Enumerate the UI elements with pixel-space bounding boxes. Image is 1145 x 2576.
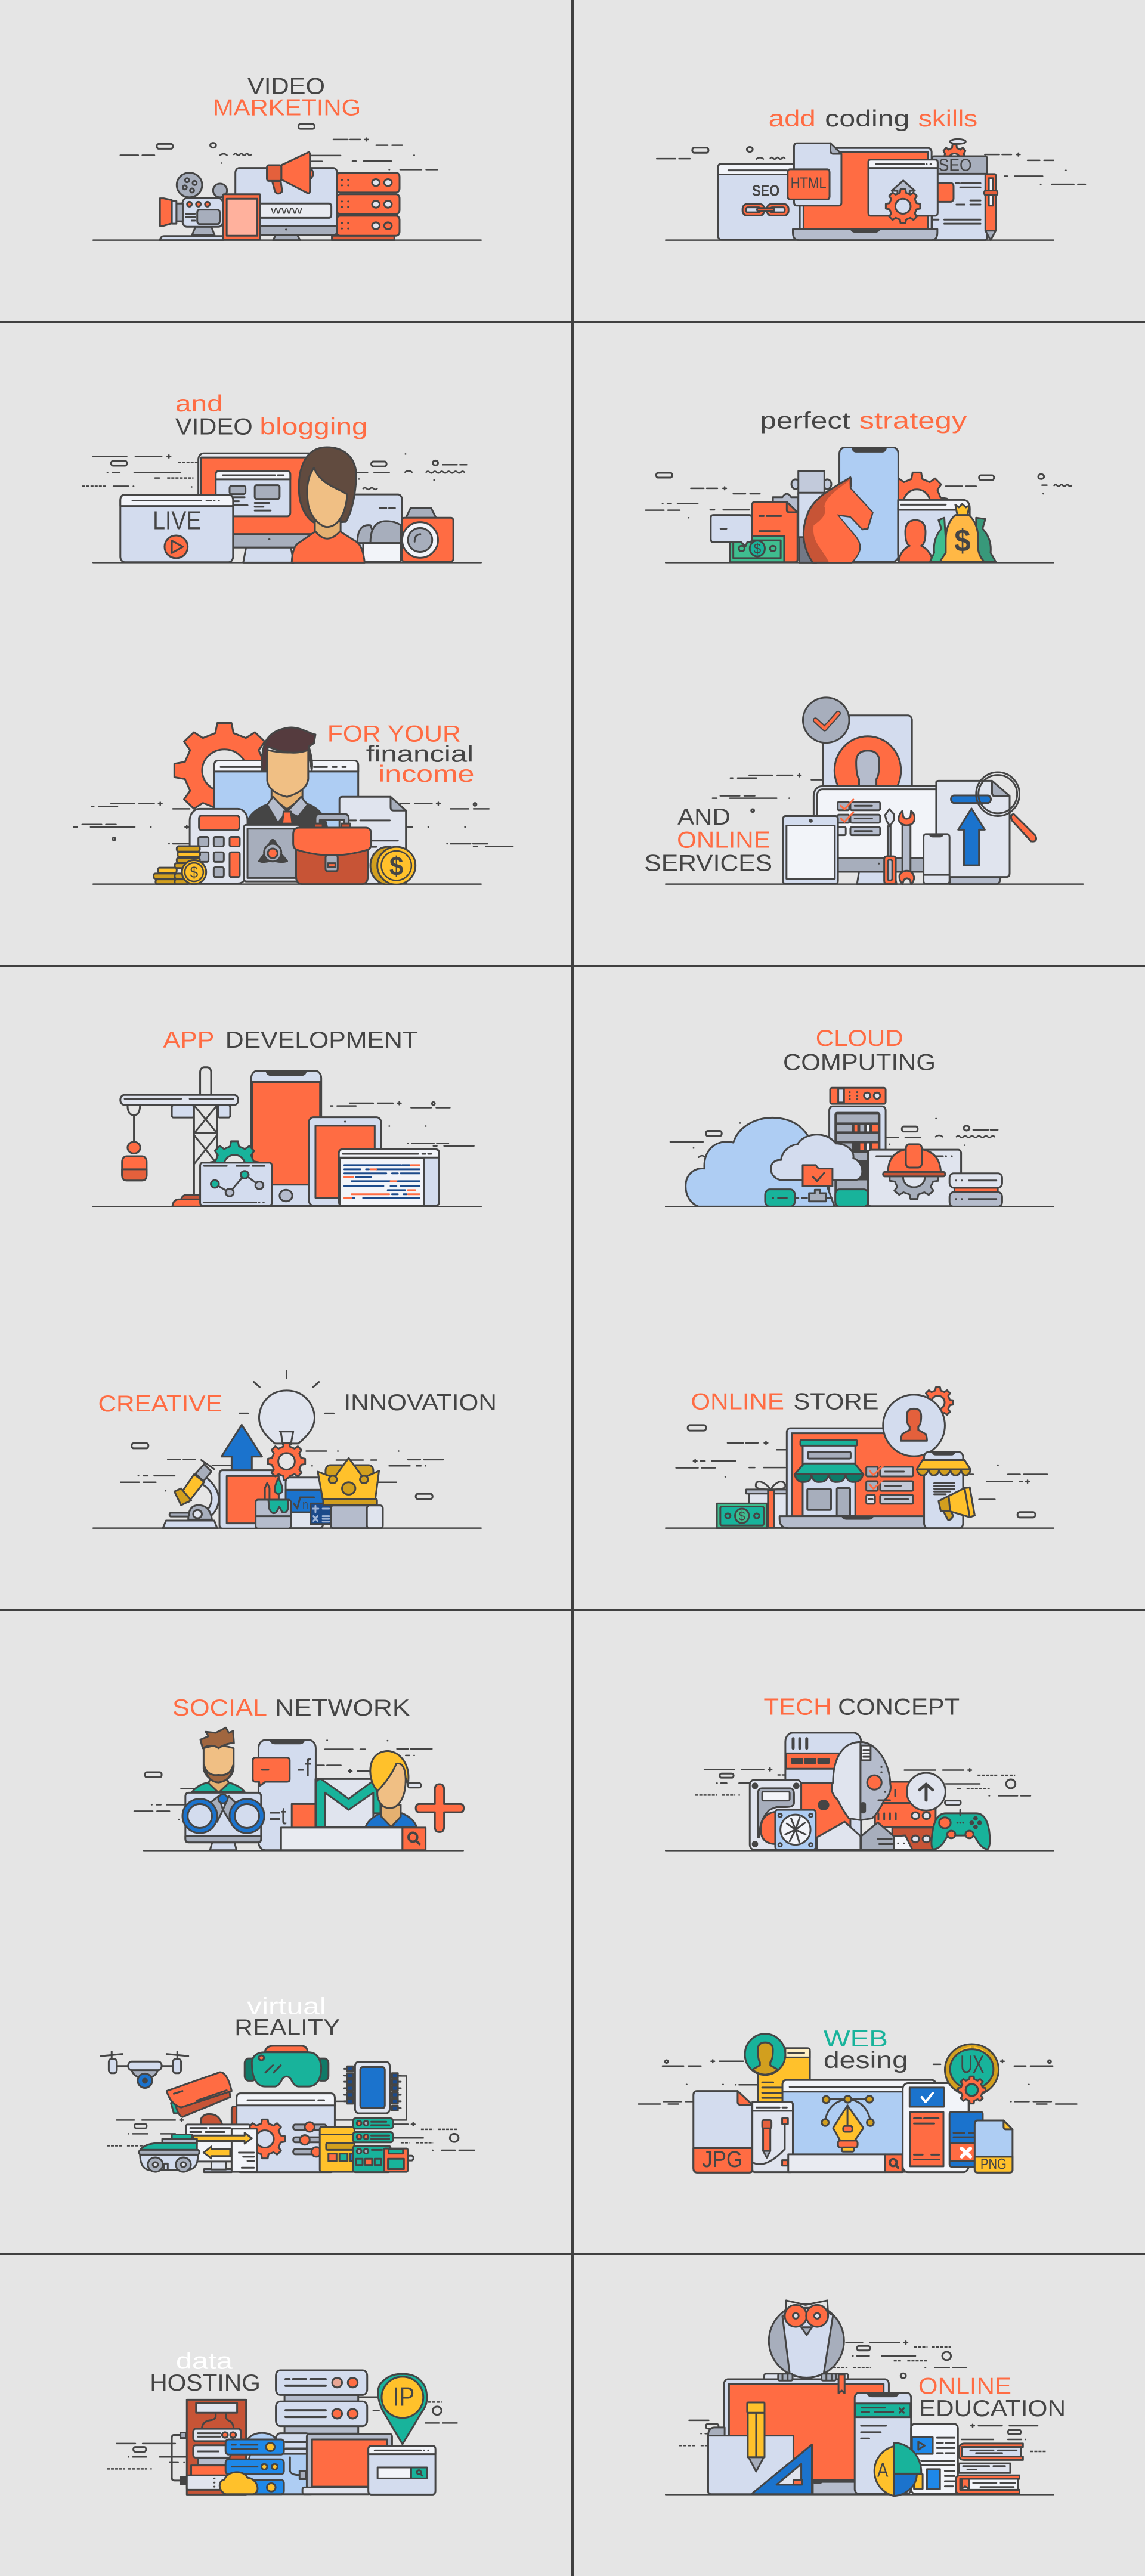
heading: data hosting: data xyxy=(176,2348,233,2374)
panel: perfect strategy xyxy=(646,408,1072,562)
block: right column rows 7 and 8 xyxy=(639,2026,1076,2496)
icon: pie chart xyxy=(874,2443,921,2496)
heading: add coding skills: skills xyxy=(918,106,977,132)
icon: game controller xyxy=(932,1810,990,1849)
heading: virtual reality xyxy=(234,1993,340,2041)
heading: video marketing: MARKETING xyxy=(213,95,361,120)
heading: online store: STORE xyxy=(793,1389,878,1414)
figure: man with beard xyxy=(192,1727,245,1792)
panel: creative innovation xyxy=(93,1371,497,1528)
icon: money bags xyxy=(930,504,996,562)
icon: banknote xyxy=(730,536,784,562)
block: right column rows 5 and 6 xyxy=(666,1387,1054,1850)
icon: tablet xyxy=(223,194,260,240)
icon: seo document: SEO xyxy=(939,156,972,175)
icon: search window xyxy=(369,2446,435,2494)
panel: online education xyxy=(666,2301,1066,2496)
panel: large server stack xyxy=(276,2370,367,2457)
heading: web desing: WEB xyxy=(824,2026,888,2052)
icon: blue servers xyxy=(225,2439,284,2494)
heading: and online services: AND xyxy=(677,804,731,829)
heading: and video blogging: blogging xyxy=(259,414,368,439)
panel: data hosting xyxy=(107,2348,457,2494)
heading: perfect strategy: perfect xyxy=(760,408,850,434)
icon: calculator xyxy=(190,809,247,884)
icon: browser window xyxy=(216,471,290,516)
panel: social network xyxy=(134,1695,464,1850)
icon: owl xyxy=(769,2301,844,2380)
heading: creative innovation: CREATIVE xyxy=(98,1391,222,1417)
icon: jpg file xyxy=(694,2091,753,2172)
icon: large cloud xyxy=(686,1117,834,1206)
icon: location pin ip: IP xyxy=(393,2382,414,2411)
icon: html file xyxy=(788,143,841,206)
heading: video marketing xyxy=(213,73,361,120)
icon: profile window xyxy=(898,500,970,562)
figure: woman xyxy=(292,447,364,562)
heading: creative innovation xyxy=(98,1390,497,1417)
icon: magnifying glass xyxy=(976,772,1036,841)
block: left column rows 1 and 2 xyxy=(82,73,481,562)
icon: briefcase xyxy=(293,814,372,884)
icon: safe xyxy=(244,825,301,881)
heading: app development xyxy=(163,1027,418,1053)
icon: png file: PNG xyxy=(980,2156,1007,2172)
heading: add coding skills: coding xyxy=(825,106,909,132)
icon: mobile shop xyxy=(917,1452,970,1528)
heading: add coding skills: add xyxy=(769,106,816,132)
icon: server tower xyxy=(830,1106,886,1206)
heading: app development: APP xyxy=(163,1027,214,1053)
icon: tablet xyxy=(309,1117,381,1206)
heading: data hosting: HOSTING xyxy=(150,2370,261,2396)
icon: laptop with shop xyxy=(779,1428,932,1528)
icon: bookmark xyxy=(838,2374,844,2393)
icon: money bags: $ xyxy=(954,524,971,558)
icon: jpg file: JPG xyxy=(702,2147,742,2172)
icon: pen xyxy=(984,174,998,240)
heading: add coding skills xyxy=(769,106,977,132)
icon: phone: -f xyxy=(296,1754,311,1782)
icon: set square xyxy=(751,2445,812,2494)
heading: social network: NETWORK xyxy=(275,1695,410,1721)
icon: android head xyxy=(817,1742,912,1850)
heading: social network xyxy=(172,1695,410,1721)
panel: live window xyxy=(120,495,233,562)
icon: tablet board xyxy=(724,2374,889,2494)
heading: creative innovation: INNOVATION xyxy=(344,1390,497,1416)
icon: laptop screen xyxy=(219,1470,286,1528)
panel: online store xyxy=(666,1387,1054,1528)
icon: profile card xyxy=(823,716,912,805)
icon: monitor with search bar: www xyxy=(270,203,303,216)
heading: and online services: SERVICES xyxy=(644,850,772,876)
heading: perfect strategy: strategy xyxy=(859,408,967,434)
icon: browser window xyxy=(214,760,358,829)
heading: online education: EDUCATION xyxy=(919,2395,1066,2422)
heading: and video blogging xyxy=(175,391,368,439)
icon: seo link window: SEO xyxy=(752,182,779,200)
panel: settings window xyxy=(237,2094,335,2172)
icon: gear window xyxy=(868,160,937,223)
icon: coins: $ xyxy=(190,864,199,881)
icon: gear behind xyxy=(887,472,947,534)
icon: small cloud with folder xyxy=(771,1135,862,1187)
icon: large gear xyxy=(174,723,274,818)
heading: app development: DEVELOPMENT xyxy=(225,1027,418,1053)
icon: circuit chip xyxy=(344,2062,401,2113)
icon: gear xyxy=(923,1387,953,1418)
panel: cloud computing xyxy=(666,1026,1054,1206)
panel: live window: LIVE xyxy=(153,506,202,535)
icon: document xyxy=(752,502,797,562)
icon: search bar xyxy=(281,1828,426,1850)
icon: drone xyxy=(101,2052,188,2088)
heading: social network: SOCIAL xyxy=(172,1695,267,1721)
icon: books xyxy=(956,2444,1023,2494)
block: right column rows 3 and 4 xyxy=(644,698,1083,1206)
icon: crown xyxy=(318,1458,379,1505)
icon: network nodes xyxy=(765,1190,868,1206)
heading: for your financial income xyxy=(327,721,475,787)
icon: orange rack xyxy=(187,2399,246,2494)
icon: seo document xyxy=(932,145,987,240)
icon: light bulb xyxy=(239,1371,333,1444)
icon: server stack xyxy=(332,173,400,240)
heading: and online services: ONLINE xyxy=(677,827,770,853)
icon: puzzle pieces xyxy=(773,471,831,537)
heading: cloud computing xyxy=(783,1026,936,1075)
icon: pie chart: A xyxy=(877,2460,889,2481)
icon: banknote: $ xyxy=(754,541,761,556)
heading: tech concept: CONCEPT xyxy=(838,1694,960,1720)
icon: rack unit xyxy=(830,1088,886,1104)
icon: calculator xyxy=(311,1503,332,1524)
figure: businessman xyxy=(246,727,327,827)
heading: for your financial income: FOR YOUR xyxy=(327,721,461,747)
icon: teal gear xyxy=(210,1141,259,1190)
icon: teal servers xyxy=(353,2119,393,2172)
heading: online education xyxy=(918,2373,1066,2422)
icon: phone xyxy=(840,448,898,562)
icon: screwdriver xyxy=(884,809,896,884)
icon: tablet xyxy=(783,816,838,884)
icon: chart card xyxy=(200,1163,272,1206)
icon: back screen with clouds xyxy=(340,494,402,562)
icon: desktop monitor xyxy=(199,453,343,562)
icon: pencil xyxy=(747,2402,765,2472)
icon: formula book xyxy=(286,1478,323,1528)
block: left column rows 7 and 8 xyxy=(101,1993,475,2494)
icon: hard drive xyxy=(750,1780,802,1850)
icon: coins xyxy=(154,846,416,884)
icon: laptop xyxy=(793,148,937,240)
icon: search bar xyxy=(788,2154,902,2172)
icon: laptop xyxy=(302,2434,392,2494)
figure: blonde woman xyxy=(366,1751,417,1827)
icon: phone xyxy=(251,1071,321,1206)
heading: video marketing: VIDEO xyxy=(247,73,325,99)
icon: avatar xyxy=(745,2034,785,2075)
icon: location pin ip xyxy=(378,2374,427,2444)
icon: blue phone xyxy=(949,2112,983,2166)
icon: yellow cloud xyxy=(219,2472,258,2494)
icon: gift box xyxy=(746,1482,787,1528)
icon: floppy disk xyxy=(384,2148,413,2172)
panel: video blogging xyxy=(82,391,481,562)
icon: upload circle xyxy=(906,1773,945,1810)
icon: monitor with binoculars xyxy=(182,1792,264,1850)
icon: right server xyxy=(875,1782,936,1850)
icon: mail xyxy=(315,1779,380,1827)
panel: web design xyxy=(639,2026,1076,2172)
icon: wrench xyxy=(899,811,915,884)
panel: video marketing xyxy=(93,73,481,240)
panel: app development xyxy=(93,1027,481,1206)
icon: monitor with checklist xyxy=(813,787,944,884)
panel: tech concept xyxy=(666,1694,1054,1850)
heading: cloud computing: CLOUD xyxy=(816,1026,903,1051)
heading: online education: ONLINE xyxy=(918,2373,1011,2399)
panel: virtual reality xyxy=(101,1993,475,2172)
heading: data hosting xyxy=(150,2348,261,2396)
icon: code window xyxy=(339,1150,439,1206)
icon: plus sign xyxy=(416,1784,464,1832)
icon: yellow document xyxy=(758,2048,810,2103)
icon: crane xyxy=(120,1067,239,1206)
icon: formula book: n xyxy=(302,1498,308,1512)
icon: blue arrow xyxy=(221,1425,262,1475)
block: left column rows 5 and 6 xyxy=(93,1371,497,1850)
icon: chess knight xyxy=(803,477,872,562)
heading: tech concept: TECH xyxy=(764,1694,831,1720)
icon: phone: =t xyxy=(268,1802,287,1830)
heading: and online services xyxy=(644,804,772,876)
icon: png file xyxy=(974,2120,1013,2172)
icon: speech bubble xyxy=(711,515,752,546)
icon: html file: HTML xyxy=(791,175,827,192)
heading: virtual reality: REALITY xyxy=(234,2015,340,2041)
icon: boxes xyxy=(331,1506,383,1528)
icon: yellow megaphone xyxy=(939,1487,974,1520)
icon: check badge xyxy=(803,698,849,743)
block: right column rows 1 and 2 xyxy=(646,106,1085,562)
icon: design window xyxy=(782,2080,936,2172)
icon: banknote: $ xyxy=(739,1510,745,1524)
icon: chat bubble xyxy=(253,1758,290,1786)
icon: storefront xyxy=(794,1440,864,1515)
icon: document xyxy=(339,797,406,884)
icon: seo link window xyxy=(718,164,802,240)
icon: security camera xyxy=(166,2072,240,2127)
icon: banknote xyxy=(717,1503,767,1528)
heading: and video blogging: and xyxy=(175,391,223,417)
icon: phone xyxy=(258,1740,315,1850)
panel: coding skills xyxy=(657,106,1085,240)
panel: checklist xyxy=(867,1465,913,1504)
icon: coins: $ xyxy=(389,851,403,881)
heading: perfect strategy xyxy=(760,408,967,434)
icon: server tower xyxy=(785,1733,861,1849)
heading: cloud computing: COMPUTING xyxy=(783,1049,936,1075)
icon: monitor with search bar xyxy=(236,168,337,240)
icon: vr goggles xyxy=(245,2046,329,2086)
icon: film camera xyxy=(160,173,227,240)
icon: gear xyxy=(268,1442,305,1480)
icon: folder xyxy=(708,2428,793,2494)
heading: web desing: desing xyxy=(824,2048,908,2073)
icon: photo camera xyxy=(402,508,453,562)
icon: newspaper xyxy=(911,2424,958,2494)
icon: pencil cup xyxy=(256,1478,291,1528)
heading: and video blogging: VIDEO xyxy=(175,414,253,439)
icon: phone xyxy=(855,2393,911,2494)
heading: virtual reality: virtual xyxy=(247,1993,326,2019)
icon: cooling fan xyxy=(775,1810,816,1850)
heading: for your financial income: income xyxy=(378,761,475,787)
icon: sky dome xyxy=(239,2433,311,2494)
heading: web desing xyxy=(824,2026,908,2073)
icon: tablet with cards xyxy=(903,2083,968,2172)
panel: online services xyxy=(644,698,1083,884)
icon: phone xyxy=(924,834,949,884)
heading: tech concept xyxy=(764,1694,960,1720)
icon: megaphone xyxy=(267,152,313,194)
heading: online store xyxy=(691,1389,878,1414)
icon: user circle xyxy=(883,1395,945,1456)
heading: for your financial income: financial xyxy=(366,741,474,767)
icon: microscope xyxy=(163,1460,219,1528)
block: left column rows 3 and 4 xyxy=(73,721,513,1206)
heading: online store: ONLINE xyxy=(691,1389,784,1414)
icon: transfer document xyxy=(186,2125,257,2172)
icon: ux badge: UX xyxy=(960,2051,984,2079)
icon: rover xyxy=(139,2135,199,2172)
icon: pencil window xyxy=(753,2102,793,2172)
panel: financial income xyxy=(73,721,513,884)
icon: small servers xyxy=(949,1174,1002,1206)
icon: ux badge xyxy=(945,2044,999,2111)
icon: yellow window xyxy=(320,2127,354,2172)
icon: file upload xyxy=(936,781,1010,884)
icon: helmet window xyxy=(868,1144,961,1206)
